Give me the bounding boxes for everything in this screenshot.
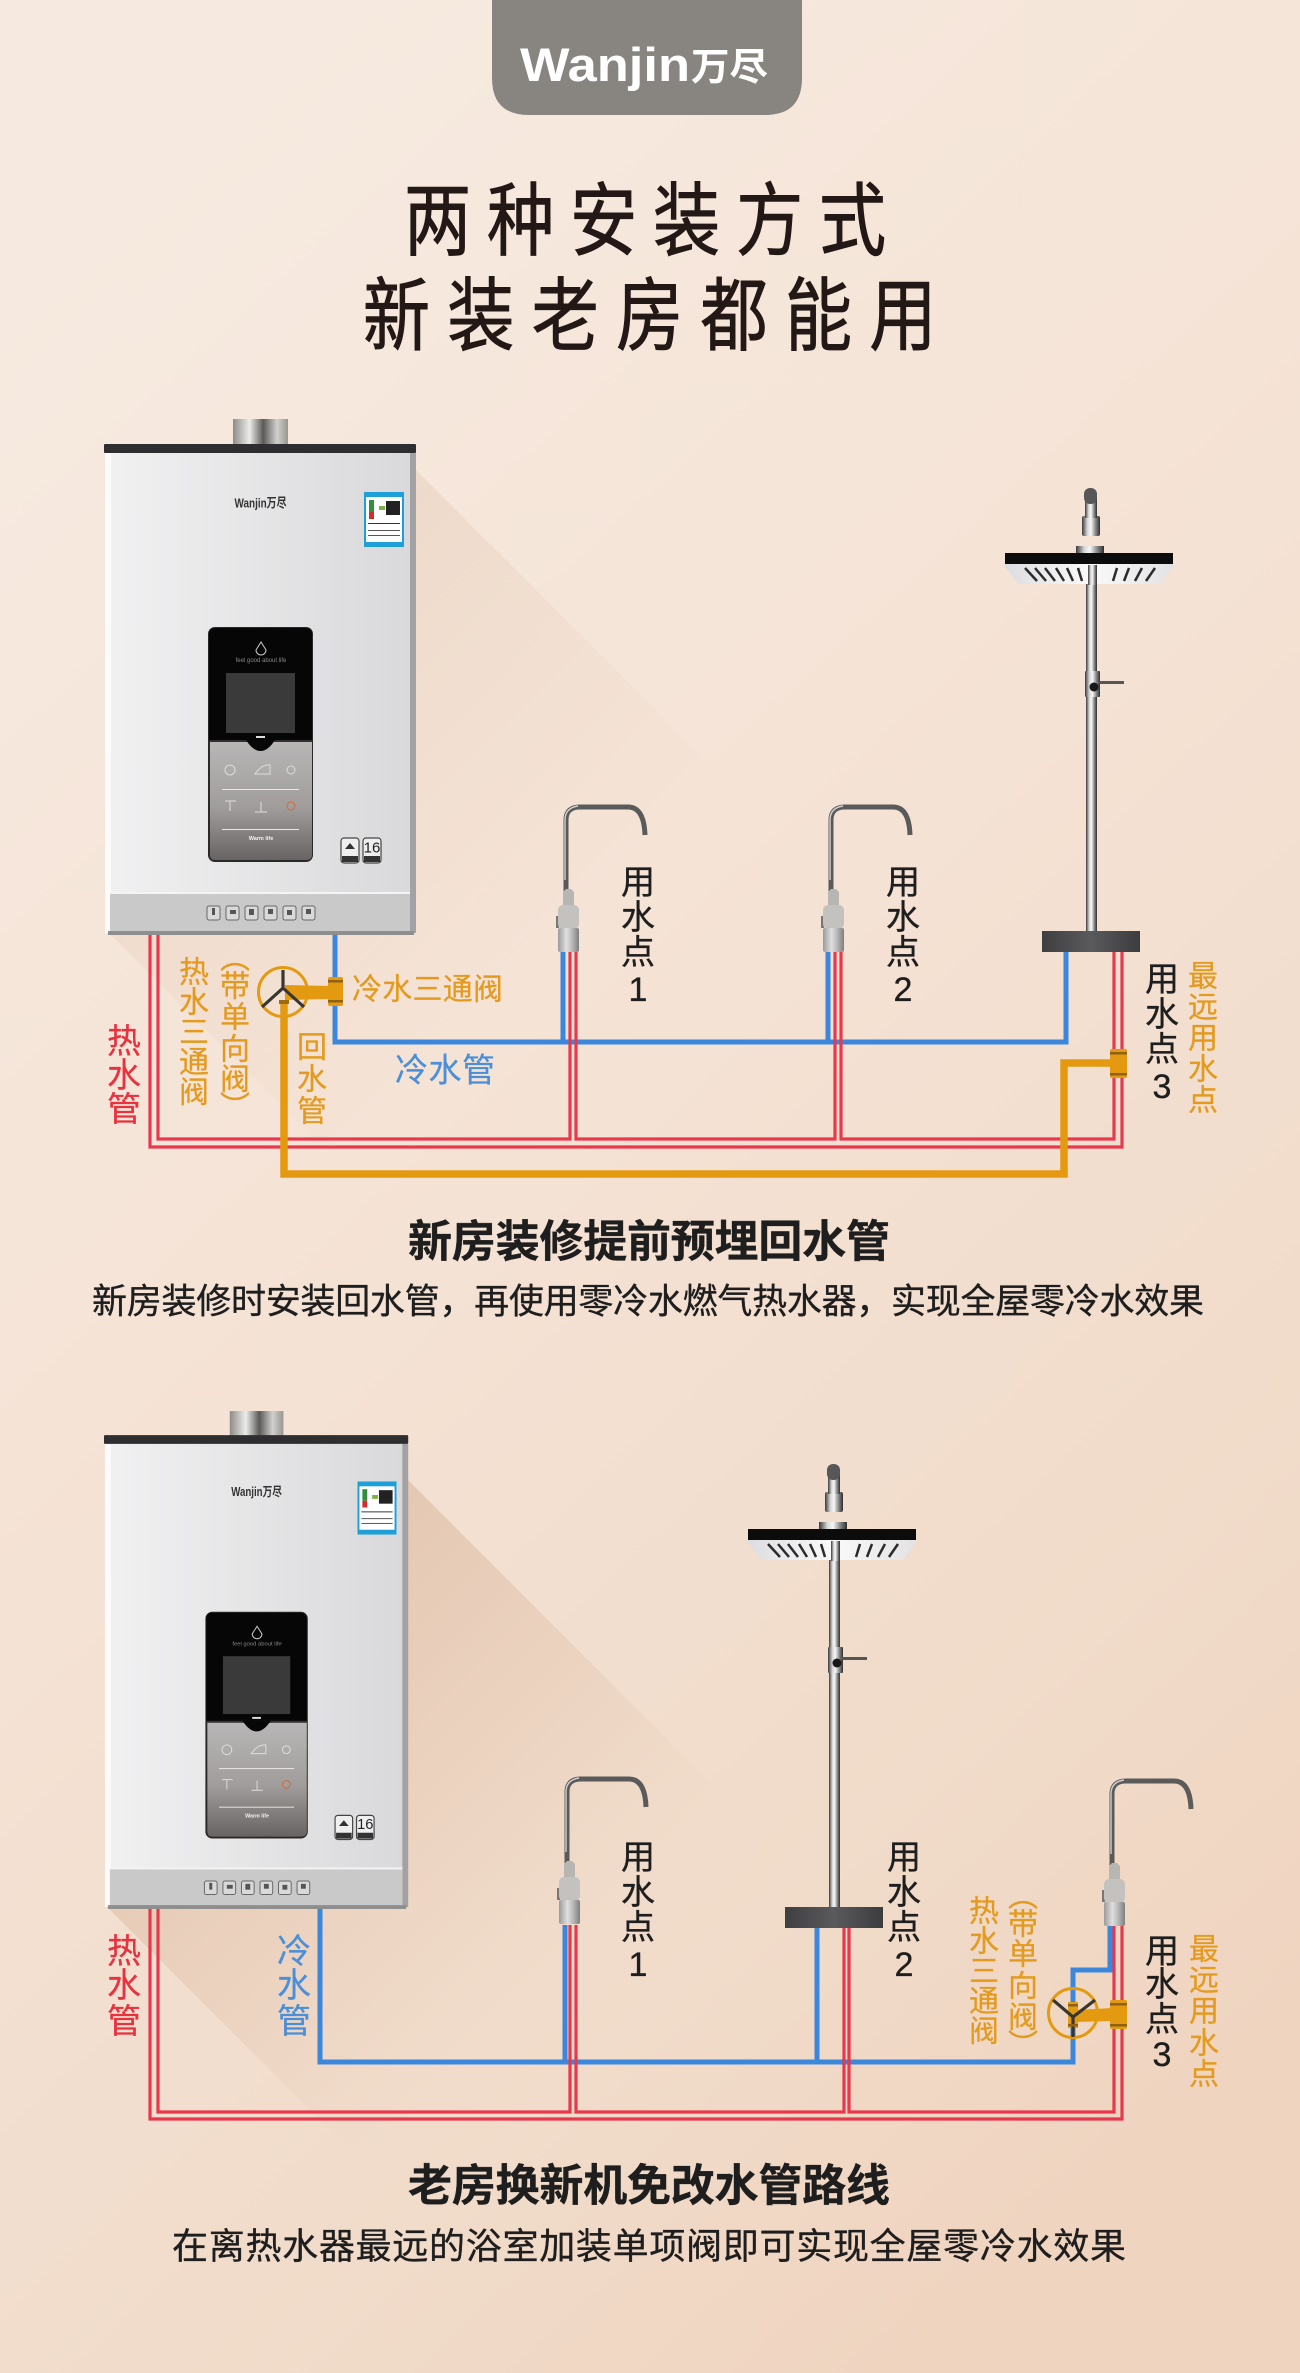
title: 新装老房都能用 — [363, 271, 954, 361]
faucet: point 1 — [557, 1778, 646, 1924]
label: hot water pipe: 热水管 — [107, 1933, 141, 2041]
label: return pipe: 回水管 — [297, 1032, 327, 1128]
water heater two: feel good about life — [232, 1642, 282, 1648]
water heater one: Wanjin万尽 — [234, 496, 286, 510]
label: cold three-way valve: 冷水三通阀 — [352, 974, 503, 1006]
description: section two: 在离热水器最远的浴室加装单项阀即可实现全屋零冷水效果 — [172, 2226, 1126, 2266]
label: water point 2: 用水点2 — [887, 1839, 921, 1984]
faucet: point 1 — [556, 806, 645, 952]
heading: section two: 老房换新机免改水管路线 — [408, 2162, 890, 2210]
water heater two: Warm life — [245, 1813, 269, 1819]
water heater one: 16 — [364, 840, 380, 856]
water heater two — [104, 1411, 408, 1909]
label: water point 1: 用水点1 — [621, 864, 655, 1009]
label: water point 1: 用水点1 — [621, 1839, 655, 1984]
label: water point 3: 用水点3 — [1145, 1933, 1179, 2074]
logo tab: Wanjin — [520, 38, 690, 91]
pipes: section one — [150, 935, 1122, 1174]
valve: point 3 cold three-way — [1110, 1049, 1127, 1078]
water heater one: Warm life — [249, 836, 273, 842]
shower: point 3 — [1003, 488, 1175, 952]
shower: point 2 — [746, 1464, 918, 1928]
label: with check valve: ︵带单向阀︶ — [1008, 1880, 1038, 2062]
faucet: point 2 — [821, 806, 910, 952]
faucet: point 3 — [1102, 1780, 1191, 1926]
label: hot three-way valve: 热水三通阀 — [969, 1896, 999, 2048]
shadow: heater two — [108, 1480, 816, 2252]
title — [363, 176, 954, 361]
water heater one: feel good about life — [236, 658, 287, 664]
shadow: heater one — [110, 470, 823, 1262]
water heater one — [104, 419, 416, 935]
pipes: section two — [150, 1908, 1122, 2119]
valve: point 3 three-way with check valve — [1048, 1988, 1127, 2038]
label: farthest water point: 最远用水点 — [1188, 960, 1218, 1118]
label: hot water pipe: 热水管 — [107, 1023, 141, 1129]
label: cold water pipe: 冷水管 — [395, 1052, 495, 1088]
heading: section one: 新房装修提前预埋回水管 — [408, 1218, 890, 1266]
label: cold water pipe: 冷水管 — [277, 1933, 311, 2041]
description: section one: 新房装修时安装回水管，再使用零冷水燃气热水器，实现全屋零冷水效果 — [92, 1282, 1204, 1322]
label: water point 2: 用水点2 — [886, 864, 920, 1009]
label: farthest water point: 最远用水点 — [1189, 1934, 1219, 2092]
label: with check valve: ︵带单向阀︶ — [220, 942, 250, 1124]
valve: hot water three-way with check valve — [258, 968, 343, 1016]
label: hot three-way valve: 热水三通阀 — [179, 956, 209, 1110]
title: 两种安装方式 — [404, 176, 902, 266]
water heater two: 16 — [357, 1817, 373, 1833]
water heater two: Wanjin万尽 — [231, 1485, 282, 1499]
label: water point 3: 用水点3 — [1145, 961, 1179, 1106]
logo tab — [492, 0, 802, 115]
logo tab: 万尽 — [691, 47, 768, 89]
